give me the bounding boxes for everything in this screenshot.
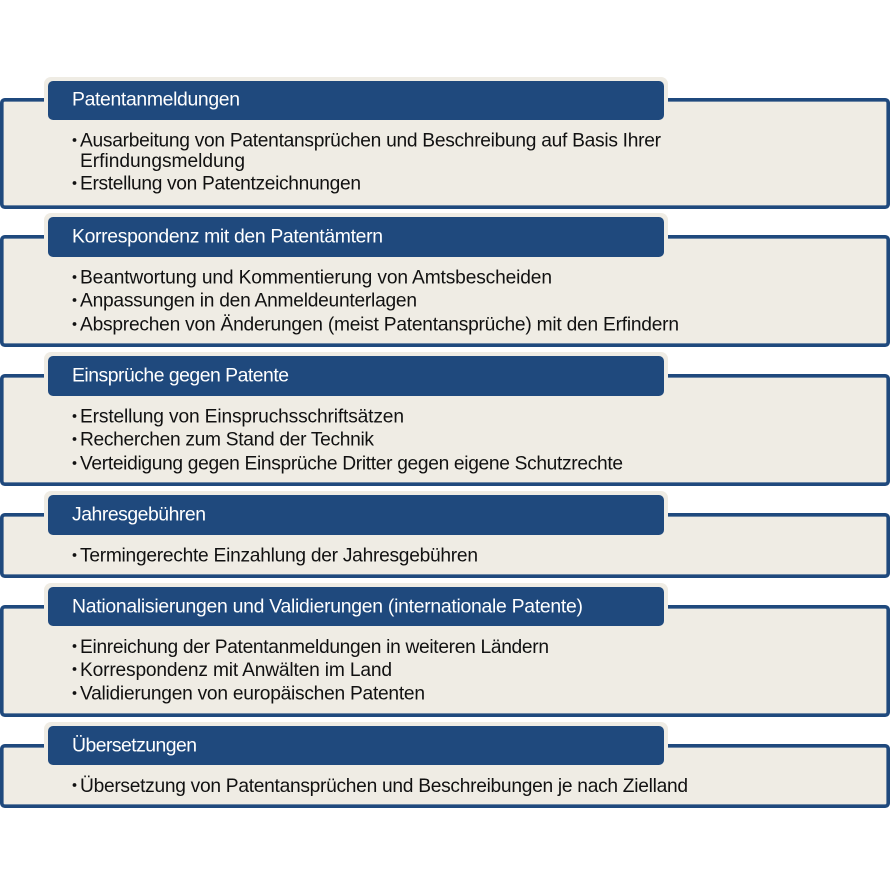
panel: Übersetzungen <box>2 722 888 806</box>
heading: Nationalisierungen: Nationalisierungen und Validierungen (internationale Patente) <box>72 596 583 618</box>
panel: Jahresgebühren <box>2 491 888 576</box>
heading: Patentanmeldungen: Patentanmeldungen <box>72 88 240 110</box>
text block: Einsprüche items <box>73 406 623 474</box>
heading: Korrespondenz: Korrespondenz mit den Patentämtern <box>72 226 383 248</box>
text block: Patentanmeldungen items: Erstellung von Patentzeichnungen <box>80 174 361 194</box>
text block: Nationalisierungen items: Korrespondenz mit Anwälten im Land <box>80 660 392 681</box>
text block: Jahresgebühren item: Termingerechte Einzahlung der Jahresgebühren <box>80 546 478 566</box>
text block: Einsprüche items: Verteidigung gegen Einsprüche Dritter gegen eigene Schutzrechte <box>80 454 623 474</box>
panel: Einsprüche gegen Patente <box>2 352 888 484</box>
text block: Einsprüche items: Recherchen zum Stand der Technik <box>80 430 374 450</box>
text block: Patentanmeldungen items <box>73 130 662 194</box>
text block: Einsprüche items: Erstellung von Einspruchsschriftsätzen <box>80 406 404 428</box>
text block: Korrespondenz items <box>73 268 679 336</box>
text block: Nationalisierungen items: Einreichung der Patentanmeldungen in weiteren Ländern <box>80 637 549 658</box>
text block: Patentanmeldungen items: Ausarbeitung von Patentansprüchen und Beschreibung auf Basis Ihrer <box>80 130 662 152</box>
text block: Korrespondenz items: Beantwortung und Kommentierung von Amtsbescheiden <box>80 268 552 288</box>
heading: Einsprüche: Einsprüche gegen Patente <box>72 364 289 386</box>
heading: Jahresgebühren: Jahresgebühren <box>72 504 206 526</box>
text block: Übersetzungen item: Übersetzung von Patentansprüchen und Beschreibungen je nach Zielland <box>80 776 688 797</box>
panel: Nationalisierungen und Validierungen <box>2 583 888 715</box>
heading: Übersetzungen: Übersetzungen <box>72 734 197 756</box>
text block: Korrespondenz items: Absprechen von Änderungen (meist Patentansprüche) mit den Erfindern <box>80 314 679 336</box>
text block: Nationalisierungen items <box>73 637 549 704</box>
panel: Patentanmeldungen <box>2 77 888 207</box>
text block: Nationalisierungen items: Validierungen von europäischen Patenten <box>80 684 425 704</box>
text block: Korrespondenz items: Anpassungen in den Anmeldeunterlagen <box>80 290 417 312</box>
panel: Korrespondenz mit den Patentämtern <box>2 213 888 345</box>
text block: Patentanmeldungen items: Erfindungsmeldung <box>80 151 245 172</box>
